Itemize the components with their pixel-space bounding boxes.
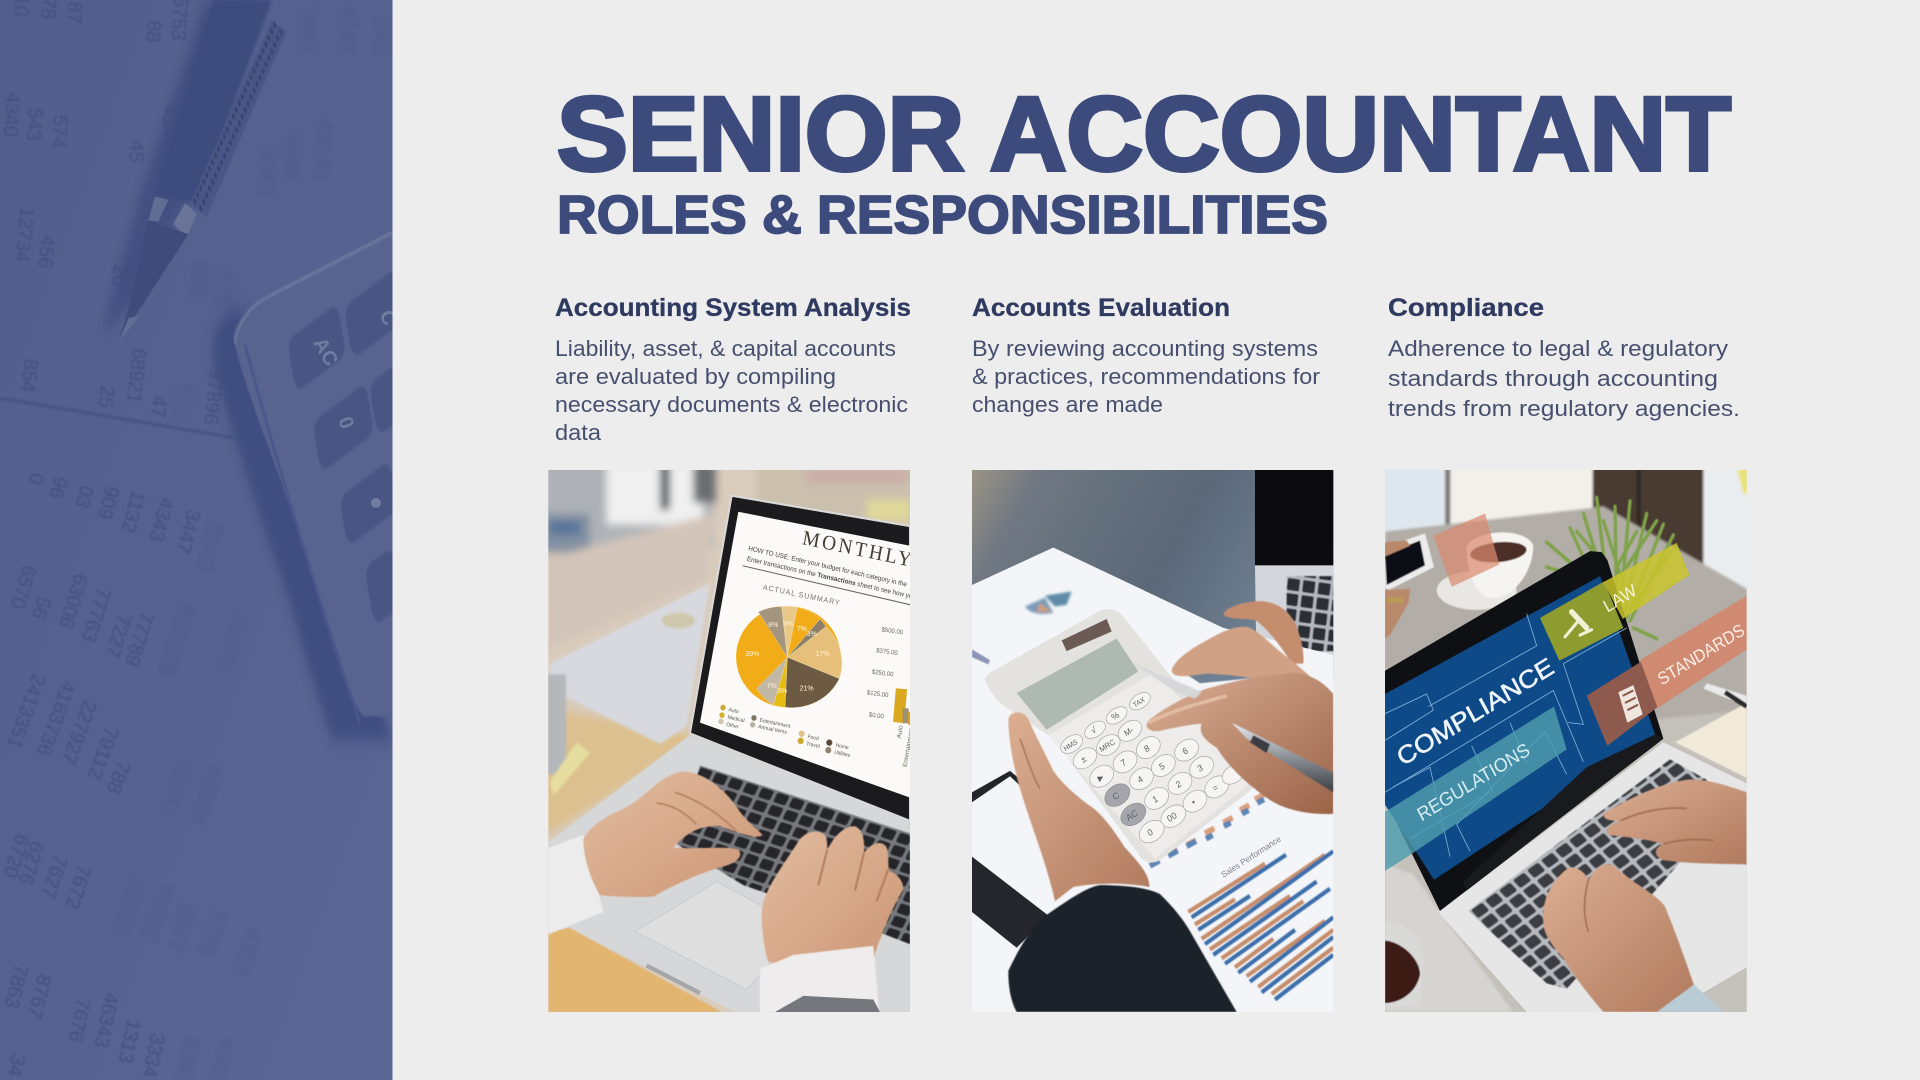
laptop screen in background bbox=[1255, 460, 1355, 565]
key legends: 5 bbox=[1157, 761, 1166, 772]
pie labels: 39% bbox=[745, 649, 760, 658]
key legends: MRC bbox=[1098, 737, 1117, 754]
small pie on paper bbox=[1025, 591, 1072, 614]
ledger numbers: 7227 bbox=[101, 611, 135, 660]
ledger numbers: 227927 bbox=[57, 697, 100, 767]
ledger numbers: 56 bbox=[27, 594, 55, 622]
left sleeve bbox=[548, 835, 603, 934]
faint out-of-focus numbers: 44141 bbox=[308, 119, 337, 182]
binder strip bbox=[972, 771, 1025, 802]
ledger numbers: 79112 bbox=[83, 724, 122, 782]
tea glass bbox=[1385, 921, 1423, 1007]
body copy: necessary documents & electronic bbox=[555, 392, 908, 417]
faint out-of-focus numbers: 3343 bbox=[192, 519, 229, 573]
faint out-of-focus numbers bbox=[109, 5, 396, 1080]
pie labels: 8% bbox=[768, 620, 779, 629]
key legends: 4 bbox=[1136, 774, 1145, 785]
calculator keys bbox=[287, 267, 406, 626]
calculator key legends bbox=[308, 307, 400, 508]
large bar chart bbox=[1188, 851, 1333, 999]
top curled finger bbox=[1223, 601, 1304, 664]
standards band bbox=[1640, 596, 1747, 708]
key legends: = bbox=[1211, 782, 1220, 794]
axis labels and bars: $0.00 bbox=[868, 711, 885, 721]
calculator shadow bbox=[213, 310, 392, 740]
key legends: % bbox=[1109, 709, 1121, 723]
blue screen bbox=[1385, 576, 1655, 880]
trackpad bbox=[635, 882, 773, 989]
ledger numbers: 909 bbox=[93, 484, 123, 522]
right sleeve bbox=[760, 946, 879, 1012]
key legends: ▶ bbox=[1096, 771, 1106, 783]
faint out-of-focus numbers: 12782 bbox=[109, 871, 151, 937]
ledger numbers: 97896 bbox=[199, 368, 227, 425]
faint out-of-focus numbers: 478 bbox=[210, 267, 239, 306]
key legends: 00 bbox=[1165, 810, 1178, 824]
pie chart bbox=[736, 606, 842, 708]
standards label: STANDARDS bbox=[1654, 619, 1748, 689]
ledger numbers: 12734 bbox=[10, 206, 38, 263]
keyboard bbox=[1468, 759, 1707, 989]
body copy: changes are made bbox=[972, 392, 1163, 417]
jacket sleeve bbox=[1008, 885, 1237, 1012]
axis labels and bars: $250.00 bbox=[871, 669, 894, 679]
left desk bbox=[1385, 864, 1513, 1012]
faint out-of-focus numbers: 7778 bbox=[193, 905, 232, 959]
ledger numbers: 47 bbox=[146, 394, 170, 419]
blurred dark background bbox=[960, 460, 1360, 674]
pie labels: 17% bbox=[816, 649, 830, 658]
law tile olive bbox=[1540, 581, 1623, 661]
faint out-of-focus numbers: 878 bbox=[369, 16, 396, 55]
salmon overlay square bbox=[1433, 514, 1499, 587]
right hand on keys bbox=[1603, 780, 1747, 864]
photo shapes traced in zoom space bbox=[0, 0, 406, 740]
key legends bbox=[1063, 696, 1220, 838]
body copy: trends from regulatory agencies. bbox=[1388, 396, 1740, 421]
column 3 text: compliance bbox=[1388, 294, 1740, 421]
ledger numbers: 25 bbox=[94, 384, 118, 409]
faint out-of-focus numbers: 222245 bbox=[154, 600, 200, 678]
key legends: 3 bbox=[1196, 762, 1205, 774]
pie legend bbox=[718, 705, 851, 759]
laptop screen bbox=[700, 512, 910, 798]
pen light band bbox=[148, 196, 168, 222]
pen bbox=[1131, 662, 1333, 792]
heading: Accounts Evaluation bbox=[972, 294, 1230, 322]
compliance label: COMPLIANCE bbox=[1393, 653, 1559, 772]
pie legend: Utilities bbox=[834, 750, 851, 759]
right hand with fingers bbox=[1147, 601, 1333, 814]
key legends: ± bbox=[1079, 753, 1088, 765]
axis labels and bars: Auto bbox=[896, 724, 905, 739]
screen bottom reflection bbox=[1463, 734, 1663, 891]
key legends: AC bbox=[1124, 807, 1140, 823]
key legends: M- bbox=[1122, 724, 1135, 738]
body copy: are evaluated by compiling bbox=[555, 364, 836, 389]
ledger numbers: 7863 bbox=[0, 962, 32, 1011]
pie legend: Auto bbox=[728, 707, 739, 715]
small bar chart under calculator bbox=[1150, 794, 1264, 866]
ledger numbers: 43440 bbox=[155, 103, 181, 160]
laptop base in background bbox=[1255, 565, 1360, 674]
body copy: standards through accounting bbox=[1388, 366, 1718, 391]
ledger numbers: 7672 bbox=[60, 862, 95, 911]
keyboard bbox=[677, 765, 910, 944]
subtitle: ROLES & RESPONSIBILITIES bbox=[557, 185, 1328, 245]
body copy: By reviewing accounting systems bbox=[972, 336, 1318, 361]
axis labels and bars: $375.00 bbox=[876, 647, 899, 657]
axis labels and bars: $125.00 bbox=[866, 689, 889, 699]
faint out-of-focus numbers: 972 bbox=[168, 384, 197, 423]
keys bbox=[1058, 689, 1248, 847]
ledger numbers: 2413351 bbox=[2, 671, 49, 751]
solar panel bbox=[1062, 619, 1112, 651]
body copy: Adherence to legal & regulatory bbox=[1388, 336, 1728, 361]
pie legend: Annual Items bbox=[758, 724, 788, 736]
body copy: & practices, recommendations for bbox=[972, 364, 1320, 389]
chart caption: Sales Performance bbox=[1219, 833, 1283, 880]
key legends: C bbox=[1111, 790, 1121, 802]
pie legend: Other bbox=[726, 722, 739, 730]
pen barrel bbox=[154, 0, 272, 203]
column 2 text: accounts evaluation bbox=[972, 294, 1320, 417]
ledger numbers: 1132 bbox=[117, 488, 149, 535]
ledger numbers: 77763 bbox=[77, 585, 114, 645]
ledger numbers: 20 bbox=[107, 263, 131, 288]
ledger numbers: 4343 bbox=[144, 495, 177, 544]
pen tip bbox=[118, 220, 188, 343]
wooden desk foreground bbox=[548, 928, 722, 1012]
display bbox=[1017, 639, 1138, 730]
ledger numbers bbox=[0, 0, 227, 1079]
laptop lid bezel bbox=[690, 496, 910, 821]
ledger numbers: 3334 bbox=[137, 1031, 168, 1079]
law label: LAW bbox=[1600, 579, 1641, 616]
second finger bbox=[1172, 627, 1310, 683]
pen grip knurl bbox=[190, 21, 287, 217]
sleeve bbox=[1657, 984, 1723, 1012]
right notebook and pen bbox=[1675, 683, 1747, 778]
ledger numbers: 456 bbox=[33, 234, 59, 269]
body copy bbox=[972, 336, 1320, 417]
ledger numbers: 8767 bbox=[23, 972, 55, 1021]
key legends: • bbox=[1190, 797, 1197, 807]
column 1 text: accounting system analysis bbox=[555, 294, 911, 445]
faint out-of-focus numbers: 4343 bbox=[253, 145, 282, 196]
law band yellow bbox=[1603, 543, 1689, 619]
pie labels: 7% bbox=[797, 624, 807, 633]
body copy bbox=[1388, 336, 1740, 421]
regulations label: REGULATIONS bbox=[1413, 738, 1533, 825]
faint out-of-focus numbers: 4141 bbox=[333, 5, 362, 56]
pie legend: Medical bbox=[727, 715, 745, 724]
calculator key legends: 0 bbox=[333, 414, 358, 432]
ledger numbers: 574 bbox=[47, 114, 71, 149]
icon: clipboard checklist bbox=[1618, 685, 1643, 723]
screen instructions: Enter transactions on the Transactions sheet to see how you bbox=[746, 556, 917, 601]
plant bbox=[1547, 498, 1673, 639]
pie legend: Entertainment bbox=[759, 717, 791, 730]
keypad face bbox=[1048, 671, 1250, 858]
ledger numbers: 46343 bbox=[89, 991, 122, 1050]
key legends: TAX bbox=[1132, 696, 1147, 710]
ledger numbers: 87 bbox=[62, 1, 86, 24]
faint out-of-focus numbers: 4444 bbox=[278, 130, 307, 181]
faint out-of-focus numbers: 76732 bbox=[136, 878, 178, 944]
faint out-of-focus numbers: 43343 bbox=[155, 755, 199, 821]
ledger numbers: 68921 bbox=[122, 347, 150, 404]
ledger numbers: 96 bbox=[44, 474, 71, 501]
blurred notebook bbox=[540, 583, 710, 796]
pie legend: Home bbox=[835, 742, 849, 751]
dark binder under paper bbox=[972, 857, 1048, 948]
regulations band bbox=[1385, 707, 1567, 871]
key legends: 0 bbox=[1146, 827, 1155, 838]
heading: Compliance bbox=[1388, 294, 1544, 322]
faint out-of-focus numbers: 41773 bbox=[211, 609, 253, 675]
laptop keyboard in background bbox=[1287, 576, 1343, 651]
calculator key legends: C bbox=[375, 307, 400, 329]
faint out-of-focus numbers: 2277 bbox=[163, 900, 202, 954]
faint out-of-focus numbers: 7891 bbox=[293, 5, 322, 56]
phone in hand bbox=[1385, 533, 1434, 639]
pie labels: 21% bbox=[800, 683, 814, 693]
pen shadow bbox=[103, 0, 263, 331]
faint out-of-focus numbers: 691 bbox=[185, 260, 214, 299]
laptop front notch bbox=[647, 966, 700, 993]
white paper bbox=[972, 548, 1333, 1012]
pie labels: 7% bbox=[767, 681, 777, 690]
ledger numbers: 03 bbox=[70, 483, 97, 510]
laptop lid bezel bbox=[1385, 551, 1663, 911]
panel: left photo of ledger, pen and calculator with blue tint bbox=[0, 0, 406, 1080]
body copy: data bbox=[555, 420, 602, 445]
screen circuit lines bbox=[1385, 614, 1627, 857]
pie labels: 3% bbox=[807, 629, 817, 638]
lower hand on keys bbox=[1543, 864, 1694, 1012]
calculator body bbox=[985, 609, 1254, 863]
palm and lower fingers bbox=[1147, 673, 1333, 814]
ledger numbers: 539 bbox=[194, 17, 218, 52]
left hand bbox=[583, 772, 763, 897]
ledger numbers: 3447 bbox=[171, 507, 204, 556]
ledger numbers: 7676 bbox=[63, 996, 94, 1044]
photo 1: laptop with budget pie chart bbox=[548, 470, 938, 1012]
saucer and coffee cup bbox=[1437, 532, 1533, 610]
ledger numbers: 77789 bbox=[120, 609, 157, 669]
photo 2: hands using calculator over charts bbox=[972, 470, 1334, 1012]
laptop base bbox=[1438, 742, 1747, 1012]
ledger rule line bbox=[0, 398, 240, 439]
title: SENIOR ACCOUNTANT bbox=[557, 76, 1731, 193]
body copy: Liability, asset, & capital accounts bbox=[555, 336, 896, 361]
key legends: HMS bbox=[1063, 739, 1079, 753]
screen instructions: HOW TO USE: Enter your budget for each category in the bbox=[748, 545, 908, 589]
key legends: 7 bbox=[1119, 757, 1128, 769]
pie labels bbox=[745, 619, 830, 695]
left hand holding calculator bbox=[1008, 712, 1149, 901]
ledger numbers: 854 bbox=[16, 358, 42, 393]
body copy bbox=[555, 336, 908, 445]
pie legend: Food bbox=[807, 734, 819, 742]
ledger numbers: 88 bbox=[141, 20, 165, 43]
ledger numbers: 45 bbox=[124, 140, 148, 163]
ledger numbers: 7627 bbox=[36, 852, 71, 901]
axis labels and bars bbox=[866, 626, 915, 768]
laptop base bbox=[548, 735, 910, 1012]
screen chart heading: ACTUAL SUMMARY bbox=[762, 582, 841, 608]
faint out-of-focus numbers: 4353 bbox=[228, 925, 267, 979]
ledger numbers: 1313 bbox=[113, 1017, 144, 1065]
pie labels: 5% bbox=[783, 619, 794, 628]
calculator body bbox=[233, 231, 392, 716]
axis labels and bars: $500.00 bbox=[881, 626, 904, 636]
standards icon tile bbox=[1587, 662, 1657, 746]
ledger numbers: 543 bbox=[22, 107, 46, 142]
axis labels and bars: Entertainment bbox=[902, 727, 915, 768]
grey clear keys bbox=[1101, 779, 1150, 830]
ledger numbers: 4163736 bbox=[32, 678, 79, 758]
ledger numbers: 63006 bbox=[54, 571, 91, 631]
calculator bbox=[985, 609, 1254, 863]
ledger numbers: 6570 bbox=[6, 562, 40, 611]
blurred desk background bbox=[540, 460, 940, 1032]
heading: Accounting System Analysis bbox=[555, 294, 911, 322]
screen title text: MONTHLY B bbox=[801, 527, 938, 577]
key legends: 6 bbox=[1181, 745, 1190, 757]
ledger numbers: 34 bbox=[3, 1052, 29, 1078]
ledger numbers: 788 bbox=[102, 758, 134, 796]
ledger numbers: 0 bbox=[24, 470, 48, 487]
blurred background bbox=[1370, 460, 1770, 1032]
pie labels: 3% bbox=[777, 686, 788, 695]
faint out-of-focus numbers: 41634 bbox=[185, 762, 229, 828]
jacket cuff bbox=[775, 996, 880, 1012]
small bar fragment bbox=[972, 649, 990, 664]
key legends: 2 bbox=[1174, 778, 1183, 790]
icon: gavel bbox=[1565, 612, 1592, 637]
strip of blue desk between fingers bbox=[1187, 662, 1253, 683]
photo 3: compliance laptop with overlays bbox=[1385, 470, 1748, 1012]
calculator key legends: AC bbox=[308, 334, 342, 370]
ledger numbers: 6276 bbox=[13, 838, 48, 887]
pie legend: Travel bbox=[806, 741, 820, 750]
right hand bbox=[762, 826, 903, 964]
key legends: √ bbox=[1089, 724, 1098, 736]
key legends: 1 bbox=[1151, 793, 1160, 805]
key legends: 8 bbox=[1142, 743, 1151, 754]
